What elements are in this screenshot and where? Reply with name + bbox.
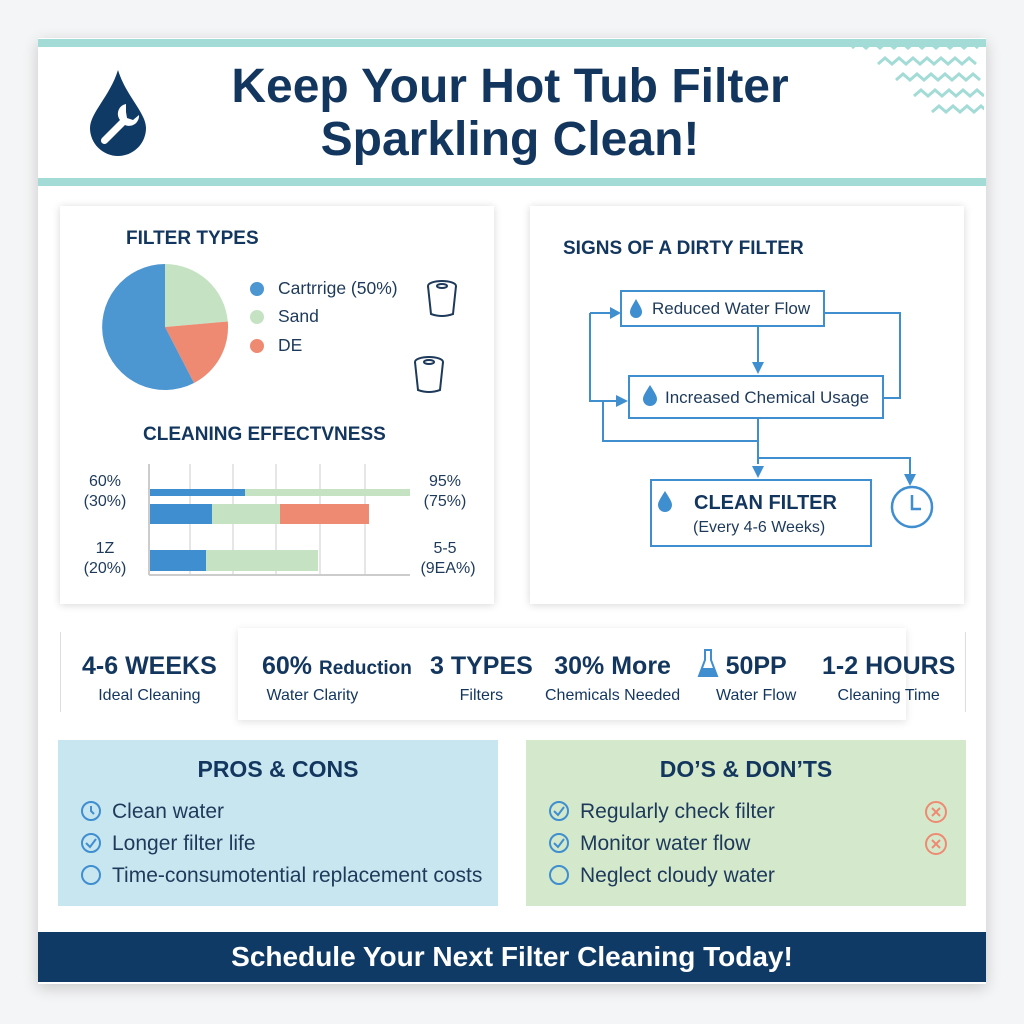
- stat: water flow: [716, 652, 796, 704]
- icon: filter cartridges: [414, 280, 457, 393]
- bar chart: (9EA%): [420, 560, 476, 577]
- header divider bar: [38, 178, 986, 186]
- legend: Cartrrige (50%): [278, 278, 398, 298]
- heading: filter types: FILTER TYPES: [126, 228, 259, 249]
- stat: hours: [822, 652, 955, 704]
- bar chart: (75%): [424, 493, 466, 510]
- panel: do's & don'ts: DO’S & DON’TS: [660, 756, 832, 782]
- panel: pros & cons: PROS & CONS: [197, 756, 359, 782]
- stat: water flow: 50PP: [726, 652, 787, 680]
- title: [231, 60, 789, 166]
- stat: chemicals: Chemicals Needed: [545, 687, 680, 704]
- flowchart: CLEAN FILTER: [694, 492, 838, 514]
- stat: weeks: [82, 652, 217, 704]
- title: Sparkling Clean!: [321, 113, 699, 166]
- icons: red x: [925, 801, 947, 855]
- decorative waves: [851, 47, 984, 114]
- heading: signs: SIGNS OF A DIRTY FILTER: [563, 238, 804, 259]
- stat: weeks: Ideal Cleaning: [98, 687, 201, 704]
- stat: reduction: [262, 652, 412, 704]
- panel: do's & don'ts: [526, 740, 966, 906]
- stat: water flow: Water Flow: [716, 687, 796, 704]
- panel: pros & cons: Clean water: [112, 800, 224, 823]
- stat: types: [430, 652, 533, 704]
- legend: Sand: [278, 306, 319, 326]
- flowchart: (Every 4-6 Weeks): [693, 519, 825, 536]
- top teal bar: [38, 39, 986, 47]
- legend: [250, 278, 398, 355]
- panel: filter types & cleaning effectiveness: [60, 206, 494, 604]
- flowchart: Reduced Water Flow: [652, 299, 811, 318]
- stat: types: 3 TYPES: [430, 652, 533, 680]
- stat: types: Filters: [460, 687, 503, 704]
- bar chart: 60%: [89, 473, 121, 490]
- bar chart: 1Z: [96, 540, 115, 557]
- panel: pros & cons: [58, 740, 498, 906]
- legend: DE: [278, 335, 302, 355]
- bar chart: [84, 464, 476, 577]
- stat: chemicals: [545, 652, 680, 704]
- panel: signs of a dirty filter: [530, 206, 964, 604]
- panel: do's & don'ts: Regularly check filter: [580, 800, 775, 823]
- flowchart: Increased Chemical Usage: [665, 388, 869, 407]
- title: Keep Your Hot Tub Filter: [231, 60, 789, 113]
- flowchart: [589, 290, 934, 547]
- bar chart: 95%: [429, 473, 461, 490]
- stat: reduction: Water Clarity: [266, 687, 358, 704]
- icon: flask: [698, 649, 718, 677]
- heading: cleaning effectiveness: CLEANING EFFECTVNESS: [143, 424, 386, 445]
- footer banner: [38, 932, 986, 982]
- footer banner: Schedule Your Next Filter Cleaning Today!: [231, 941, 793, 972]
- panel: do's & don'ts: Neglect cloudy water: [580, 864, 775, 887]
- bar chart: 5-5: [433, 540, 457, 557]
- stat: chemicals: 30% More: [554, 652, 671, 680]
- bar chart: (30%): [84, 493, 126, 510]
- pie chart: [102, 264, 228, 390]
- icon: water drop with wrench: [90, 70, 146, 156]
- panel: pros & cons: Longer filter life: [112, 832, 256, 855]
- stat: hours: Cleaning Time: [838, 687, 940, 704]
- panel: do's & don'ts: Monitor water flow: [580, 832, 750, 855]
- stats bar: [60, 628, 966, 724]
- stat: reduction: 60% Reduction: [262, 652, 412, 680]
- panel: pros & cons: Time-consumotential replacement costs: [112, 864, 482, 887]
- stat: hours: 1-2 HOURS: [822, 652, 955, 680]
- stat: weeks: 4-6 WEEKS: [82, 652, 217, 680]
- bar chart: (20%): [84, 560, 126, 577]
